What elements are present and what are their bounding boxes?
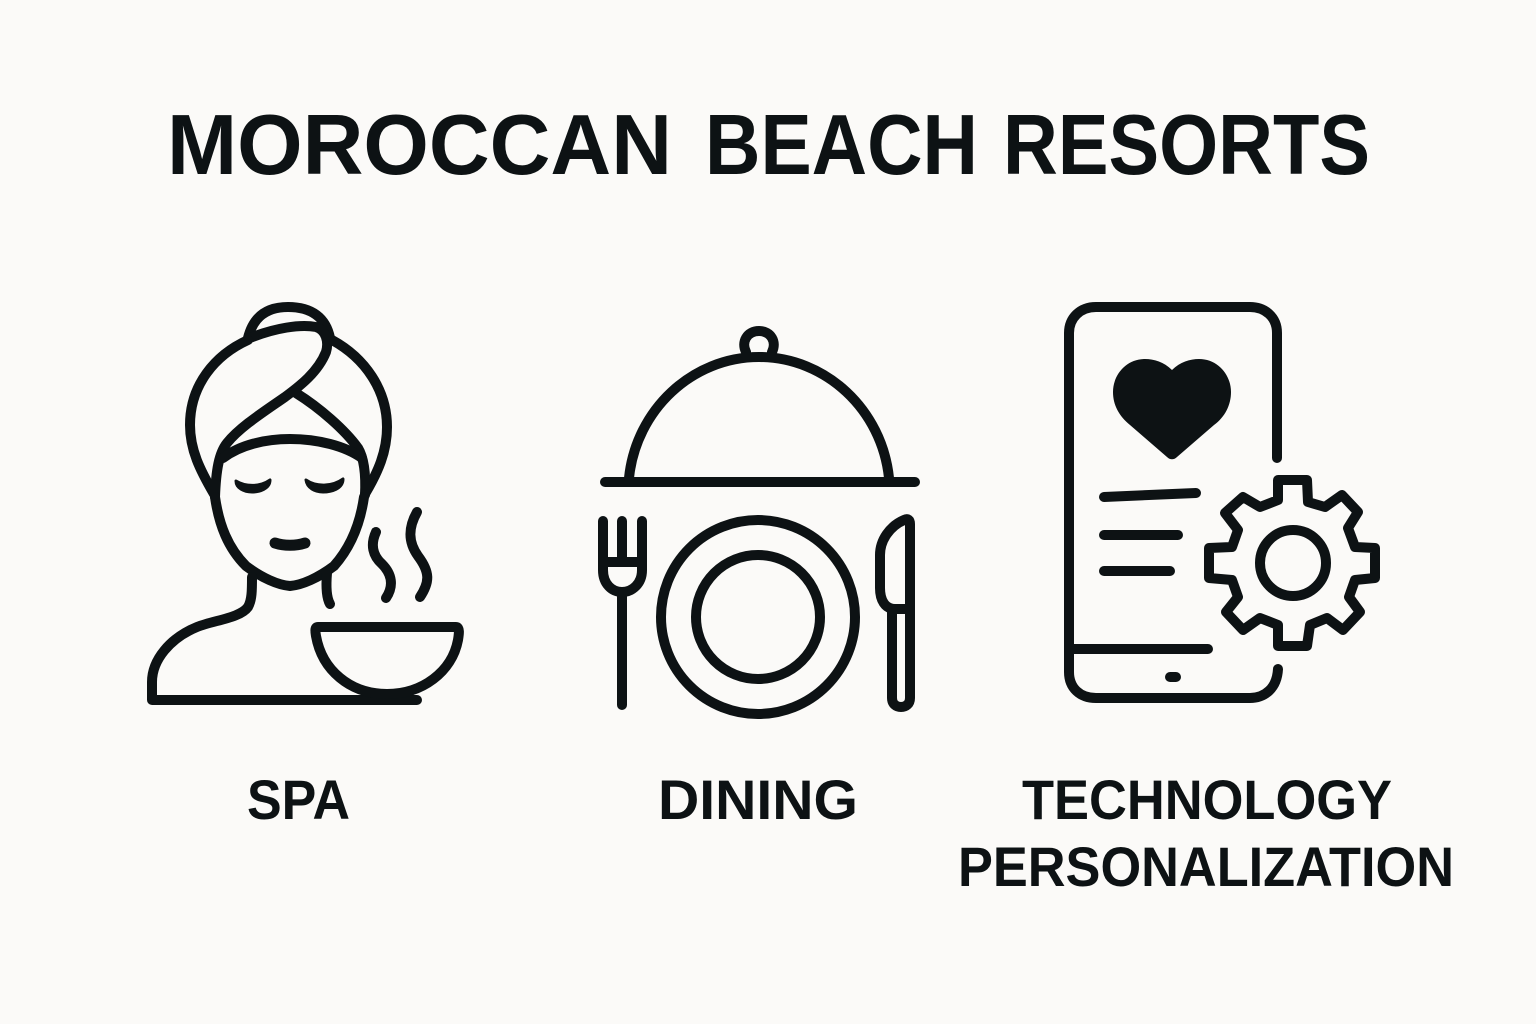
home bar divider: [1069, 644, 1208, 654]
cloche knob: [744, 331, 774, 352]
right neck: [326, 573, 330, 604]
fork: [603, 521, 642, 705]
title: BEACH: [705, 98, 978, 193]
cloche base line: [605, 477, 915, 487]
neck and shoulder: [152, 577, 417, 700]
turban outer right: [332, 340, 387, 494]
label: dining: DINING: [658, 768, 858, 831]
right eye: [306, 479, 343, 492]
plate outer rim: [661, 520, 855, 714]
turban inner right fold: [296, 393, 365, 495]
label: technology personalization: [958, 768, 1454, 898]
icon: phone with heart and gear: [1069, 307, 1375, 698]
home button: [1170, 672, 1176, 682]
label: spa: SPA: [247, 768, 350, 831]
title: RESORTS: [1003, 98, 1370, 193]
mouth: [275, 543, 305, 545]
gear: [1209, 480, 1375, 646]
label: technology personalization: PERSONALIZATION: [958, 835, 1454, 898]
gear hub: [1260, 530, 1326, 596]
steam left: [373, 532, 391, 598]
turban outer left: [190, 340, 248, 494]
label: technology personalization: TECHNOLOGY: [1022, 768, 1392, 831]
bowl: [315, 627, 459, 694]
text line 1: [1104, 493, 1196, 497]
phone body: [1069, 307, 1278, 698]
left eye: [236, 480, 270, 492]
text line 3: [1104, 566, 1170, 576]
plate inner rim: [696, 555, 820, 679]
forehead band: [223, 439, 362, 458]
heart: [1113, 359, 1231, 459]
cloche dome: [629, 357, 889, 478]
icon: dining cloche, plate and cutlery: [603, 331, 915, 714]
icon: spa woman with towel and steaming bowl: [152, 307, 459, 700]
text line 2: [1104, 530, 1178, 540]
knife: [880, 519, 910, 707]
face outline: [215, 497, 364, 586]
towel bun: [248, 307, 330, 338]
steam right: [410, 512, 427, 597]
title: [167, 98, 1370, 193]
title: MOROCCAN: [167, 98, 672, 193]
towel wrap band: [215, 326, 327, 497]
